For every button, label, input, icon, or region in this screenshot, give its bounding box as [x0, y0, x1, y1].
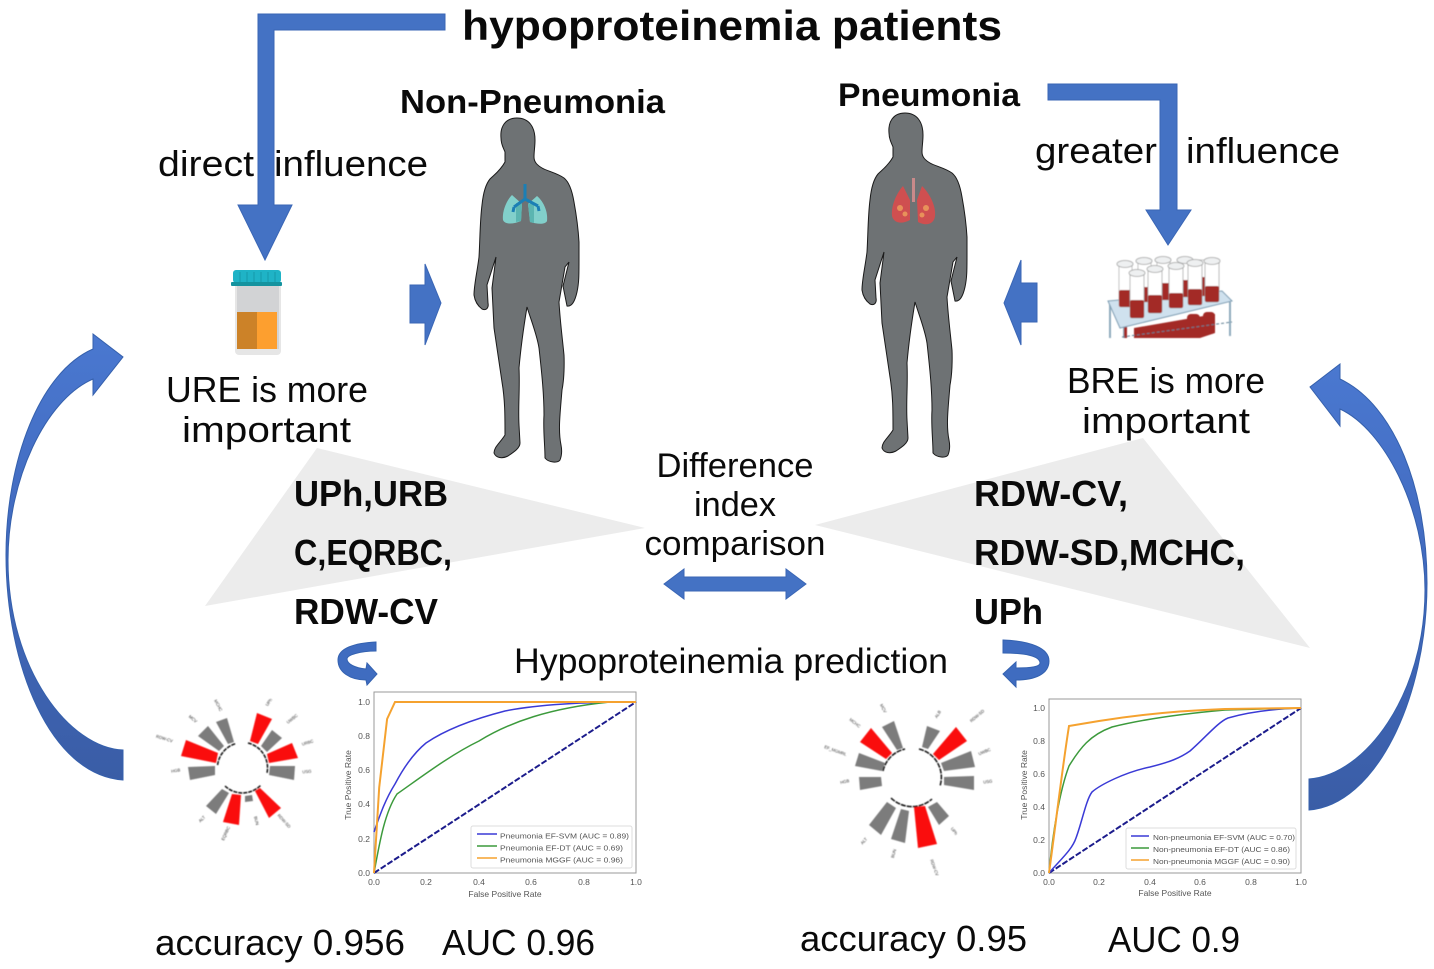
chart: left ROC curve: 0.8: [578, 877, 590, 887]
chart: right radial feature chart: HGB: [840, 778, 850, 785]
chart: left ROC curve: 0.0: [358, 868, 370, 878]
text: Hypoproteinemia prediction: Hypoproteinemia prediction: [514, 642, 948, 681]
text: right accuracy: accuracy 0.95: [800, 918, 1027, 959]
chart: left radial feature chart: ALT: [198, 814, 207, 823]
chart: left ROC curve: 0.0: [368, 877, 380, 887]
icon: infected lungs: [892, 178, 935, 224]
text: left AUC: AUC 0.96: [442, 922, 595, 963]
chart: left radial feature chart: HGB: [171, 767, 181, 774]
text: left accuracy: accuracy 0.956: [155, 922, 405, 963]
label: direct influence: influence: [274, 143, 428, 184]
chart: left ROC curve: 0.6: [525, 877, 537, 887]
icon: blood tube rack: [1108, 256, 1232, 338]
text: BRE difference indexes: [974, 473, 1245, 632]
chart: right radial feature chart: MCV: [879, 703, 888, 714]
chart: right ROC curve: Non-pneumonia MGGF (AUC = 0.90): [1153, 857, 1291, 866]
arrow: left curl: [338, 642, 377, 685]
chart: right radial feature chart: USG: [983, 778, 993, 785]
text: BRE difference indexes: RDW-CV,: [974, 473, 1128, 514]
arrow: double-headed comparison: [664, 569, 806, 599]
chart: left radial feature chart: [156, 697, 314, 841]
chart: right ROC curve: 0.4: [1144, 877, 1156, 887]
chart: left ROC curve: 1.0: [630, 877, 642, 887]
text: URE difference indexes: RDW-CV: [294, 591, 438, 632]
heading: Pneumonia: Pneumonia: [838, 77, 1020, 113]
chart: right ROC curve: 0.8: [1033, 736, 1045, 746]
chart: right ROC curve: 1.0: [1295, 877, 1307, 887]
figure: non-pneumonia body: [474, 118, 579, 462]
chart: right radial feature chart: MCHC: [848, 717, 861, 729]
text: right AUC: AUC 0.9: [1108, 919, 1240, 960]
chart: right ROC curve: 0.6: [1033, 769, 1045, 779]
text: Difference index comparison: comparison: [644, 525, 826, 563]
chart: right radial feature chart: UPh: [950, 826, 959, 836]
chart: left radial feature chart: BUN: [253, 816, 260, 826]
panel: right grey triangle: [815, 438, 1310, 648]
label: greater influence: [1035, 130, 1340, 171]
chart: left ROC curve: 1.0: [358, 697, 370, 707]
text: BRE is more important: important: [1082, 400, 1250, 441]
chart: left ROC curve: Pneumonia MGGF (AUC = 0.96): [500, 856, 624, 864]
text: BRE difference indexes: RDW-SD,MCHC,: [974, 532, 1245, 573]
chart: left ROC curve: False Positive Rate: [468, 889, 542, 899]
chart: right radial feature chart: UWBC: [978, 747, 991, 756]
arrow: large right curve: [1309, 364, 1427, 810]
chart: left radial feature chart: MCV: [188, 714, 198, 724]
chart: left radial feature chart: RDW-CV: [156, 734, 174, 744]
arrow: Pneumonia to BRE: [1048, 84, 1191, 245]
title: hypoproteinemia patients: [462, 2, 1002, 49]
chart: right ROC curve: 1.0: [1033, 703, 1045, 713]
text: Difference index comparison: [644, 447, 826, 563]
figure: pneumonia body: [862, 113, 967, 457]
chart: right radial feature chart: ALT: [860, 836, 869, 845]
chart: left ROC curve: 0.8: [358, 731, 370, 741]
chart: left radial feature chart: URBC: [301, 738, 314, 747]
chart: right radial feature chart: RDW-SD: [969, 708, 985, 723]
chart: right ROC curve: 0.6: [1194, 877, 1206, 887]
chart: left radial feature chart: UPh: [264, 697, 274, 707]
arrow: title to URE: [238, 14, 445, 260]
chart: left radial feature chart: USG: [302, 769, 312, 774]
chart: left ROC curve: [343, 692, 642, 899]
label: greater influence: greater: [1035, 130, 1157, 171]
chart: left ROC curve: 0.6: [358, 765, 370, 775]
arrow: URE to non-pneumonia body: [410, 264, 441, 345]
chart: right ROC curve: 0.4: [1033, 802, 1045, 812]
chart: left ROC curve: True Positive Rate: [343, 750, 353, 820]
chart: right radial feature chart: [824, 703, 993, 877]
chart: right ROC curve: 0.0: [1033, 868, 1045, 878]
chart: right ROC curve: Non-pneumonia EF-DT (AUC = 0.86): [1153, 845, 1291, 854]
chart: left ROC curve: Pneumonia EF-DT (AUC = 0.69): [500, 844, 624, 852]
heading: Non-Pneumonia: Non-Pneumonia: [400, 83, 666, 120]
text: BRE difference indexes: UPh: [974, 591, 1043, 632]
chart: right ROC curve: 0.0: [1043, 877, 1055, 887]
arrow: right curl: [1003, 640, 1049, 687]
text: URE difference indexes: UPh,URB: [294, 473, 448, 514]
text: URE difference indexes: C,EQRBC,: [294, 532, 452, 573]
label: greater influence: influence: [1186, 130, 1340, 171]
chart: right ROC curve: 0.2: [1033, 835, 1045, 845]
icon: healthy lungs: [503, 184, 547, 224]
text: URE is more important: important: [182, 409, 351, 450]
chart: right ROC curve: False Positive Rate: [1138, 888, 1212, 898]
chart: right radial feature chart: RDW-CV: [929, 859, 940, 877]
chart: right ROC curve: Non-pneumonia EF-SVM (AUC = 0.70): [1153, 833, 1296, 842]
chart: left radial feature chart: EQRBC: [220, 826, 231, 841]
text: BRE is more important: [1067, 360, 1265, 441]
chart: left ROC curve: 0.2: [358, 834, 370, 844]
text: URE is more important: URE is more: [166, 369, 368, 410]
arrow: BRE to pneumonia body: [1004, 260, 1037, 345]
label: direct influence: direct: [158, 143, 254, 184]
chart: right ROC curve: 0.8: [1245, 877, 1257, 887]
label: direct influence: [158, 143, 428, 184]
icon: urine sample jar: [231, 270, 282, 355]
chart: right ROC curve: 0.2: [1093, 877, 1105, 887]
arrow: large left curve: [6, 334, 123, 780]
chart: left radial feature chart: UWBC: [285, 713, 299, 725]
text: URE difference indexes: [294, 473, 452, 632]
chart: left ROC curve: 0.2: [420, 877, 432, 887]
chart: left ROC curve: 0.4: [358, 799, 370, 809]
chart: right ROC curve: [1019, 699, 1307, 898]
panel: left grey triangle: [205, 448, 645, 606]
chart: right radial feature chart: EF_MGMRL: [824, 744, 848, 757]
text: BRE is more important: BRE is more: [1067, 360, 1265, 401]
text: Difference index comparison: Difference: [656, 447, 814, 485]
chart: left radial feature chart: MCHC: [213, 699, 223, 712]
text: Difference index comparison: index: [694, 486, 776, 524]
chart: left ROC curve: 0.4: [473, 877, 485, 887]
text: URE is more important: [166, 369, 368, 450]
chart: left radial feature chart: RDW-SD: [277, 813, 292, 829]
chart: left ROC curve: Pneumonia EF-SVM (AUC = 0.89): [500, 832, 630, 840]
chart: right radial feature chart: ALB: [933, 709, 942, 719]
chart: right ROC curve: True Positive Rate: [1019, 750, 1029, 820]
chart: right radial feature chart: BUN: [890, 849, 897, 859]
